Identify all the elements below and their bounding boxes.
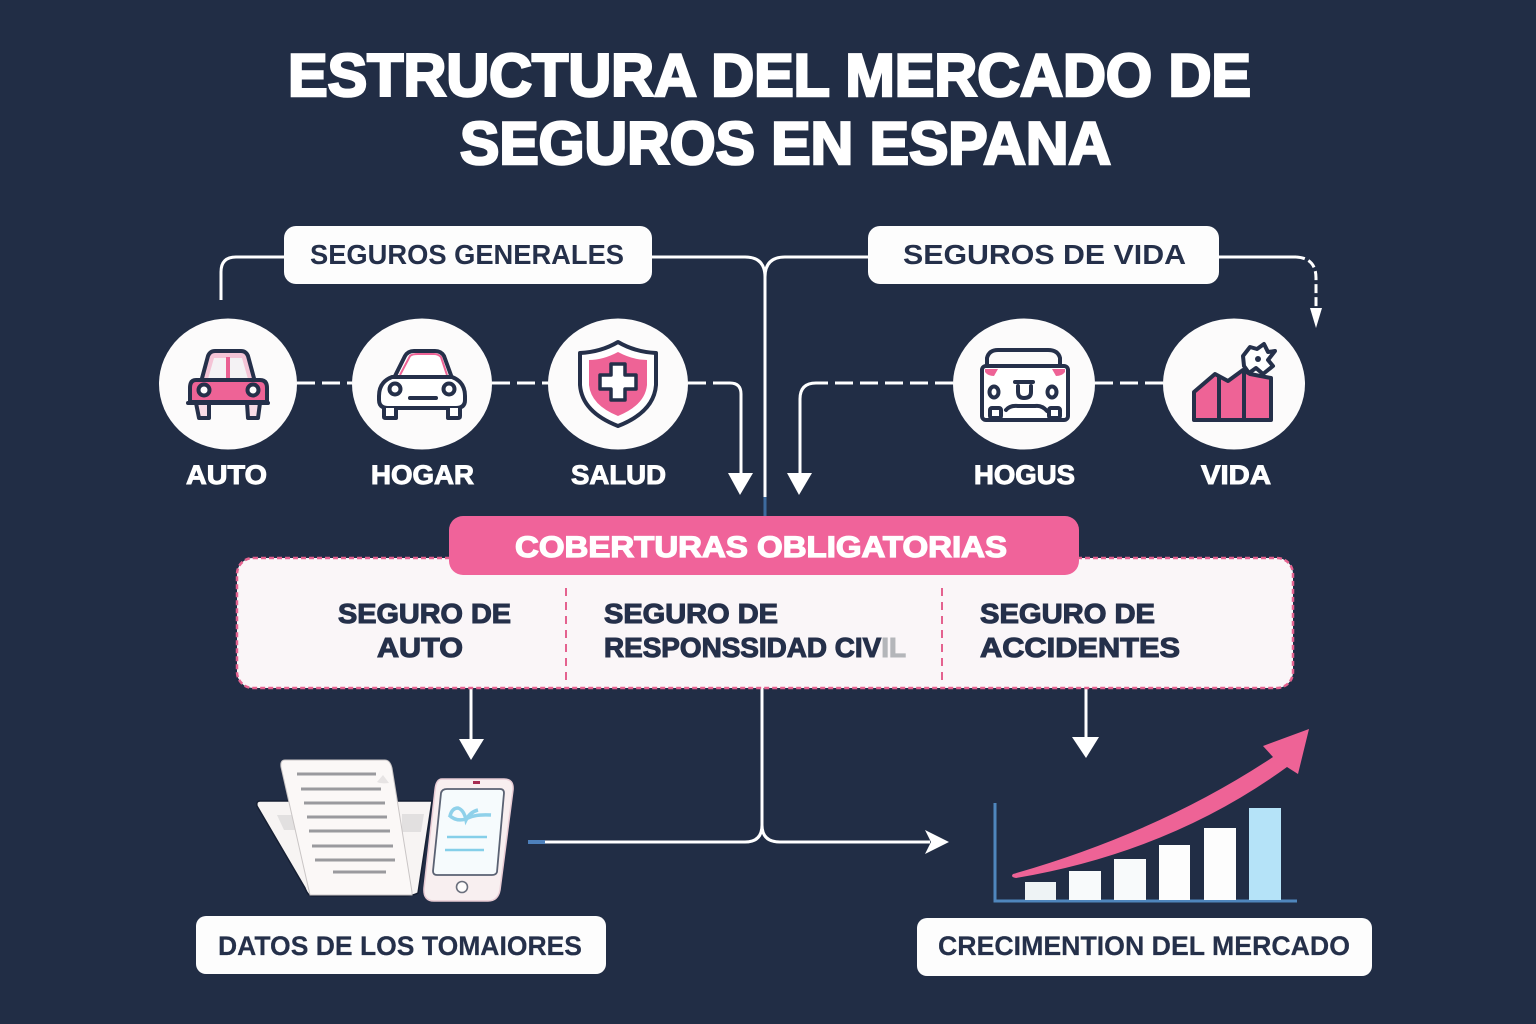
text: seguro de auto: SEGURO DE bbox=[338, 598, 511, 629]
divider lines bbox=[566, 588, 942, 682]
text: seguro de responsabilidad civil bbox=[604, 598, 906, 663]
heading: seguros generales bbox=[284, 226, 652, 284]
back sheet bbox=[257, 801, 432, 896]
icon: hogar bbox=[352, 318, 492, 450]
arrow: growth trend bbox=[1012, 729, 1309, 878]
arrow: cobertura to datos bbox=[459, 688, 484, 760]
title: SEGUROS EN ESPANA bbox=[460, 110, 1111, 177]
connector: dashed links between right circles bbox=[787, 383, 1163, 495]
text: seguro de accidentes bbox=[980, 598, 1180, 663]
connector: generales to auto bbox=[221, 257, 284, 300]
connector: vida dashed arrow bbox=[1219, 257, 1322, 328]
label: hogus: HOGUS bbox=[974, 460, 1075, 490]
phone bbox=[424, 779, 513, 901]
label: vida: VIDA bbox=[1201, 460, 1271, 490]
icon: salud shield bbox=[548, 318, 688, 450]
front sheet bbox=[281, 760, 412, 895]
label: salud: SALUD bbox=[571, 460, 666, 490]
panel: coberturas obligatorias bbox=[237, 558, 1293, 688]
label: hogar: HOGAR bbox=[371, 460, 474, 490]
title: ESTRUCTURA DEL MERCADO DE bbox=[288, 42, 1251, 109]
heading: seguros de vida bbox=[868, 226, 1219, 284]
connector: central trunk from top categories bbox=[652, 257, 868, 516]
heading: coberturas obligatorias: COBERTURAS OBLIGATORIAS bbox=[515, 531, 1007, 564]
text: seguro de accidentes: SEGURO DE bbox=[980, 598, 1155, 629]
text: seguro de responsabilidad civil: SEGURO DE bbox=[604, 598, 778, 629]
heading: coberturas obligatorias bbox=[449, 516, 1079, 575]
label: crecimiento del mercado: CRECIMENTION DEL MERCADO bbox=[938, 931, 1350, 961]
label: crecimiento del mercado bbox=[917, 918, 1372, 976]
label: datos de los tomaiores bbox=[196, 916, 606, 974]
arrow: cobertura to crecimiento bbox=[1072, 688, 1099, 758]
icon: auto bbox=[159, 318, 297, 450]
title bbox=[288, 42, 1251, 177]
bar chart: crecimiento bbox=[995, 729, 1309, 901]
text: seguro de accidentes: ACCIDENTES bbox=[980, 632, 1180, 663]
heading: seguros de vida: SEGUROS DE VIDA bbox=[903, 239, 1186, 270]
label: auto: AUTO bbox=[186, 460, 267, 490]
text: seguro de auto: AUTO bbox=[377, 632, 463, 663]
label: datos de los tomaiores: DATOS DE LOS TOMAIORES bbox=[218, 931, 582, 961]
icon: vida growth bbox=[1163, 318, 1305, 450]
icon: documents and phone bbox=[257, 760, 513, 901]
heading: seguros generales: SEGUROS GENERALES bbox=[310, 239, 624, 270]
connector: dashed links between left circles bbox=[297, 383, 753, 495]
text: seguro de auto bbox=[338, 598, 511, 663]
text: seguro de responsabilidad civil: RESPONSSIDAD CIVIL bbox=[604, 632, 906, 663]
connector: lower flow lines bbox=[528, 688, 949, 854]
icon: hogus case bbox=[953, 318, 1095, 450]
